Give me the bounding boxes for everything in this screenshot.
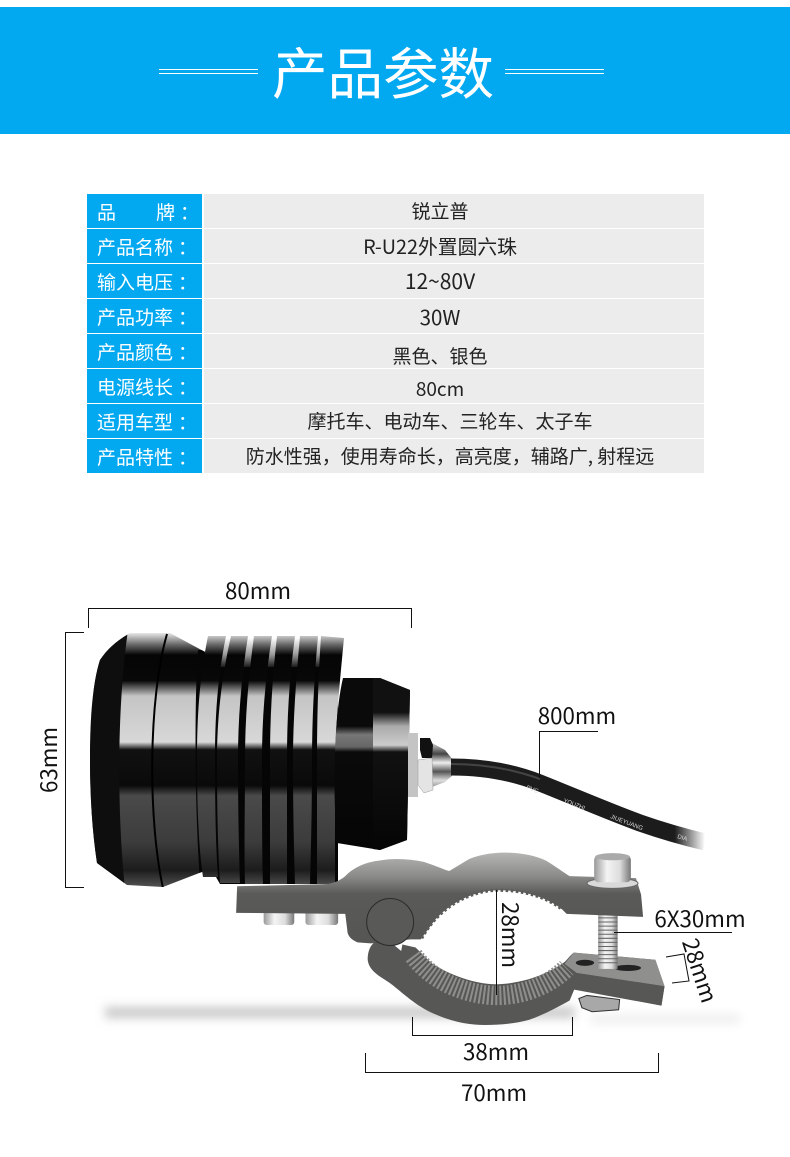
row: power: 30W [420,301,460,331]
upper teeth [422,890,563,938]
cable print: YOUZHI [562,798,586,812]
row: features: 防水性强，使用寿命长，高亮度，辅路广, 射程远 [246,442,654,469]
row: input voltage: 输入电压 ： [97,268,197,295]
row: brand [87,194,704,228]
dimension: 70mm [366,1053,658,1108]
row: cable length [87,369,704,403]
bolt head [587,853,638,888]
row: brand: 品 牌 ： [97,198,199,225]
dimension: 28mm inner: 28mm [495,902,527,968]
row: product name [87,229,704,263]
row: colour: 产品颜色 ： [97,338,197,365]
fin gap highlight [212,638,338,668]
upper clamp arm [236,853,643,943]
row: cable length: 80cm [416,375,464,402]
hinge pin [367,899,414,945]
dimension: 80mm: 80mm [225,574,291,606]
row: features [87,439,704,473]
row: cable length: 电源线长 ： [97,373,197,400]
adjustment slots [576,960,641,971]
row: input voltage [87,264,704,298]
dimension: 28mm inner [495,890,527,995]
mounting screws [264,910,338,925]
row: power [87,299,704,333]
dimension: 80mm [88,574,412,628]
dimension: 63mm: 63mm [32,727,64,793]
row: product name: 产品名称 ： [97,233,197,260]
dimension: 38mm: 38mm [463,1035,529,1067]
lower teeth [414,956,567,995]
dimension: 63mm [32,632,84,888]
row: input voltage: 12~80V [405,266,475,296]
row: product name: R-U22外置圆六珠 [363,231,517,260]
cable print: JIUEYUANG [609,814,644,832]
power cable [451,764,705,843]
cable print: DIA [676,834,688,843]
mounting clamp [236,853,665,1025]
dimension: 70mm: 70mm [461,1076,527,1108]
cooling fins [197,636,344,884]
row: applicable vehicles [87,404,704,438]
cable print: PVC [525,785,540,795]
row: colour: 黑色、银色 [392,342,488,369]
header band [0,7,790,134]
lower clamp arm [368,939,665,1025]
lower plate top face [565,953,665,986]
front housing [90,633,207,887]
bolt shaft [598,912,618,969]
dimension: 38mm [412,1017,572,1067]
lower nut [579,995,620,1012]
row: power: 产品功率 ： [97,303,197,330]
parameter table [87,194,704,473]
row: features: 产品特性 ： [97,443,197,470]
row: applicable vehicles: 摩托车、电动车、三轮车、太子车 [307,407,592,434]
dimension: 800mm: 800mm [538,699,616,731]
product dimension diagram [40,582,744,1102]
dimension: 6X30mm: 6X30mm [654,902,746,934]
cable gland nut [408,733,453,797]
dimension: 800mm [538,699,616,778]
row: applicable vehicles: 适用车型 ： [97,408,197,435]
fin core [212,667,338,884]
row: brand: 锐立普 [411,197,468,224]
cable print [525,785,688,843]
decorative line left [159,69,258,74]
row: colour [87,334,704,369]
title: 产品参数 [272,30,494,110]
decorative line right [505,69,604,74]
dimension: 28mm plate: 28mm [675,934,726,1007]
rear housing [335,678,410,850]
lower plate front face [573,973,665,1006]
ground shadow [105,1007,740,1023]
dimension: 6X30mm [614,902,746,934]
lamp body [88,630,453,890]
